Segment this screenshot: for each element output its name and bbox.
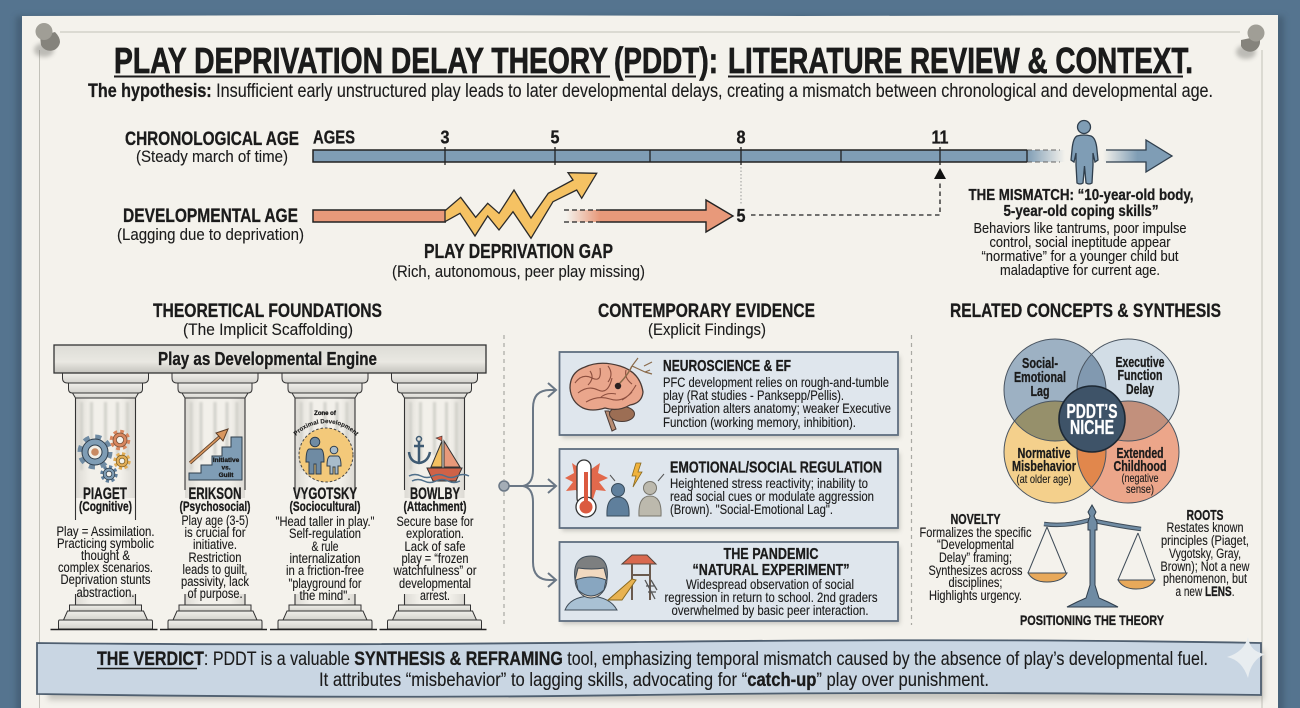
chronological timeline bar: 8 — [736, 128, 746, 148]
text: roots: a new LENS. — [1176, 584, 1234, 599]
pillar text: Bowlby: play = “frozen — [402, 551, 468, 566]
venn label: normative misbehavior: (at older age) — [1016, 472, 1072, 486]
pillar text: Erikson: leads to guilt, — [182, 562, 248, 577]
heading: contemporary evidence: CONTEMPORARY EVIDENCE — [598, 301, 815, 322]
column dividers — [504, 335, 912, 625]
venn label: PDDT niche: PDDT’S — [1066, 401, 1118, 423]
heading: theoretical foundations — [153, 301, 382, 339]
text: pandemic: “NATURAL EXPERIMENT” — [692, 562, 850, 579]
icon: stairs and arrow: Initiative — [213, 457, 240, 464]
pillar text: Piaget: Deprivation stunts — [60, 572, 151, 587]
venn label: normative misbehavior: Normative — [1018, 445, 1070, 462]
mismatch callout: 5-year-old coping skills” — [1004, 203, 1158, 220]
text: neuroscience — [663, 358, 891, 430]
pillar text: Piaget: (Cognitive) — [79, 499, 132, 514]
gap caption: (Rich, autonomous, peer play missing) — [392, 262, 645, 281]
venn label: extended childhood: Extended — [1116, 445, 1164, 462]
icon: standing person — [1071, 120, 1098, 184]
text: pandemic — [664, 546, 878, 618]
pillar one structure — [50, 373, 158, 630]
venn label: social emotional lag: Lag — [1030, 383, 1050, 400]
timeline label: chronological age: (Steady march of time) — [136, 147, 288, 166]
pillar text: Erikson: ERIKSON — [188, 484, 242, 503]
text: roots: principles (Piaget, — [1161, 533, 1249, 548]
pillar text: Bowlby — [393, 484, 477, 603]
panel: the pandemic natural experiment — [560, 542, 900, 624]
pillar text: Piaget: thought & — [81, 548, 130, 563]
text: novelty: Highlights urgency. — [929, 588, 1022, 603]
developmental arrow to five — [564, 200, 733, 232]
icon: stairs and arrow: vs. — [221, 464, 231, 472]
text: pandemic: overwhelmed by basic peer interaction. — [672, 602, 868, 618]
text: novelty — [920, 511, 1032, 603]
chronological timeline bar: 5 — [550, 128, 560, 148]
text: roots: phenomenon, but — [1163, 571, 1247, 586]
text: novelty: Delay” framing; — [939, 550, 1012, 565]
icon: stairs and arrow: Guilt — [219, 472, 234, 479]
text: novelty: Formalizes the specific — [920, 525, 1032, 540]
pillar text: Erikson: passivity, lack — [181, 574, 249, 589]
text: emotional regulation — [670, 460, 882, 517]
pillar text: Erikson: of purpose. — [188, 586, 242, 601]
pillar text: Vygotsky — [276, 484, 375, 603]
verdict banner — [37, 637, 1265, 700]
text: novelty: “Developmental — [937, 537, 1014, 552]
developmental bar — [313, 210, 446, 222]
icon: masked child and playground — [565, 555, 657, 610]
venn label: social emotional lag: Social- — [1022, 355, 1058, 372]
text: neuroscience: PFC development relies on rough-and-tumble — [663, 374, 889, 390]
venn label: executive function delay: Delay — [1126, 381, 1154, 398]
text: novelty: disciplines; — [948, 575, 1002, 590]
text: roots: Restates known — [1166, 520, 1244, 535]
timeline label: chronological age: CHRONOLOGICAL AGE — [125, 129, 299, 150]
timeline label: developmental age — [117, 206, 304, 244]
pillar three structure — [270, 373, 377, 630]
pillar text: Bowlby: developmental — [399, 576, 471, 591]
chronological timeline bar: 3 — [440, 128, 450, 148]
pillar text: Bowlby: arrest. — [420, 588, 450, 603]
pin: top right — [1236, 24, 1264, 59]
heading: related concepts: RELATED CONCEPTS & SYNTHESIS — [950, 301, 1221, 322]
text: pandemic: Widespread observation of social — [686, 576, 854, 592]
pillar text: Vygotsky: VYGOTSKY — [293, 484, 357, 503]
pillar text: Bowlby: exploration. — [406, 526, 464, 541]
icon: brain — [570, 358, 652, 431]
heading: theoretical foundations: (The Implicit Scaffolding) — [183, 321, 353, 339]
pin: top left — [34, 23, 60, 57]
pillar text: Bowlby: watchfulness” or — [393, 563, 477, 578]
pillar text: Vygotsky: the mind". — [300, 588, 350, 603]
caption: positioning the theory: POSITIONING THE THEORY — [1020, 612, 1165, 628]
pillar text: Erikson: Restriction — [188, 550, 242, 565]
pillar text: Piaget: PIAGET — [83, 484, 127, 503]
venn label: extended childhood: (negative — [1122, 471, 1159, 485]
timeline label: developmental age: (Lagging due to deprivation) — [117, 225, 304, 244]
pillar two structure — [160, 373, 267, 630]
verdict text line two: It attributes “misbehavior” to lagging skills, advocating for “catch-up” play over punishment. — [319, 669, 989, 691]
title: PLAY DEPRIVATION DELAY THEORY — [114, 40, 608, 81]
icon: zone of proximal development: Zone of — [314, 411, 337, 417]
heading: contemporary evidence — [598, 301, 815, 339]
venn label: social emotional lag: Emotional — [1014, 369, 1066, 386]
mismatch callout: “normative” for a younger child but — [982, 249, 1178, 265]
text: roots: Brown); Not a new — [1160, 559, 1250, 574]
venn label: extended childhood — [1114, 445, 1166, 496]
title — [114, 40, 1193, 81]
beam: play as developmental engine — [54, 345, 486, 373]
heading: theoretical foundations: THEORETICAL FOUNDATIONS — [153, 301, 382, 322]
pillar text: Bowlby: BOWLBY — [410, 484, 460, 503]
chronological timeline bar — [313, 128, 1065, 165]
mismatch callout: control, social ineptitude appear — [990, 235, 1171, 251]
text: roots — [1160, 507, 1250, 599]
text: pandemic: THE PANDEMIC — [724, 546, 819, 563]
icon: zone of proximal development: Proximal Development — [293, 419, 358, 436]
icon: anchor and boat — [409, 436, 469, 482]
pillar text: Vygotsky: (Sociocultural) — [290, 499, 360, 514]
text: emotional regulation: Heightened stress reactivity; inability to — [670, 475, 868, 491]
venn diagram — [1004, 339, 1179, 503]
pillar text: Vygotsky: "playground for — [288, 576, 362, 591]
pillar text: Vygotsky: internalization — [290, 551, 360, 566]
pillar text: Piaget: Practicing symbolic — [57, 536, 154, 551]
mismatch connector: 5 — [736, 206, 746, 226]
pillar text: Bowlby: Secure base for — [396, 514, 474, 529]
gap caption: PLAY DEPRIVATION GAP — [424, 241, 613, 263]
mismatch callout: THE MISMATCH: “10-year-old body, — [968, 187, 1194, 204]
pillar text: Bowlby: Lack of safe — [404, 539, 466, 554]
pillar text: Erikson: Play age (3-5) — [182, 513, 248, 528]
pillar text: Erikson: (Psychosocial) — [180, 499, 250, 514]
text: roots: Vygotsky, Gray, — [1169, 546, 1241, 561]
pillar text: Piaget — [56, 484, 154, 600]
pillar text: Vygotsky: in a friction-free — [286, 563, 364, 578]
pillar text: Piaget: abstraction. — [76, 585, 134, 600]
text: roots: ROOTS — [1186, 507, 1224, 524]
arrow: chronological continues — [1103, 140, 1172, 172]
pillar text: Vygotsky: & rule — [312, 539, 338, 554]
pillar text: Erikson: is crucial for — [184, 525, 246, 540]
chronological timeline bar: AGES — [313, 128, 355, 148]
text: emotional regulation: EMOTIONAL/SOCIAL REGULATION — [670, 460, 882, 476]
zigzag gap arrow — [445, 173, 597, 238]
mismatch connector — [736, 167, 946, 226]
pillar text: Bowlby: (Attachment) — [404, 499, 466, 514]
pillar text: Piaget: complex scenarios. — [58, 560, 153, 575]
panel: pillars — [50, 344, 487, 630]
pillar text: Vygotsky: Self-regulation — [289, 526, 361, 541]
text: neuroscience: Function (working memory, inhibition). — [663, 414, 856, 430]
pillar text: Erikson — [180, 484, 250, 601]
text: novelty: Synthesizes across — [928, 563, 1023, 578]
mismatch callout: maladaptive for current age. — [1000, 263, 1160, 279]
venn label: PDDT niche — [1066, 401, 1118, 439]
chronological timeline bar: 11 — [932, 128, 948, 148]
icon: gears — [80, 431, 129, 481]
icon: balance scale — [1028, 505, 1155, 607]
text: pandemic: regression in return to school. 2nd graders — [664, 589, 878, 605]
venn label: executive function delay: Executive — [1116, 354, 1164, 371]
venn label: extended childhood: sense) — [1126, 482, 1154, 496]
panel: emotional and social regulation — [560, 449, 900, 531]
text: novelty: NOVELTY — [950, 511, 1000, 528]
heading: contemporary evidence: (Explicit Findings) — [648, 321, 766, 339]
timeline label: chronological age — [125, 129, 299, 166]
pillar text: Vygotsky: "Head taller in play." — [276, 514, 375, 529]
venn label: executive function delay — [1116, 354, 1164, 398]
icon: thermometer and people — [565, 460, 664, 517]
venn label: normative misbehavior: Misbehavior — [1012, 458, 1076, 475]
tree connector — [499, 383, 556, 587]
pillar text: Piaget: Play = Assimilation. — [56, 524, 154, 539]
panel: neuroscience and EF — [560, 352, 900, 438]
venn label: extended childhood: Childhood — [1114, 458, 1166, 475]
title: (PDDT): — [614, 40, 718, 81]
text: neuroscience: play (Rat studies - Panksepp/Pellis). — [663, 387, 844, 403]
venn label: PDDT niche: NICHE — [1070, 417, 1114, 439]
pillar text: Erikson: initiative. — [193, 537, 237, 552]
text: neuroscience: NEUROSCIENCE & EF — [663, 358, 791, 375]
text: neuroscience: Deprivation alters anatomy; weaker Executive — [663, 400, 891, 416]
icon: stairs and arrow — [189, 429, 242, 480]
text: emotional regulation: (Brown). "Social-Emotional Lag". — [670, 501, 833, 517]
gap caption — [392, 241, 645, 281]
venn label: normative misbehavior — [1012, 445, 1076, 486]
venn label: social emotional lag — [1014, 355, 1066, 400]
pillar four structure — [380, 373, 486, 630]
mismatch callout: Behaviors like tantrums, poor impulse — [974, 221, 1186, 237]
timeline label: developmental age: DEVELOPMENTAL AGE — [123, 206, 298, 227]
mismatch callout — [968, 187, 1194, 279]
icon: zone of proximal development — [293, 410, 358, 482]
venn label: executive function delay: Function — [1118, 367, 1162, 384]
beam: play as developmental engine: Play as Developmental Engine — [158, 349, 377, 369]
text: emotional regulation: read social cues or modulate aggression — [670, 488, 874, 504]
